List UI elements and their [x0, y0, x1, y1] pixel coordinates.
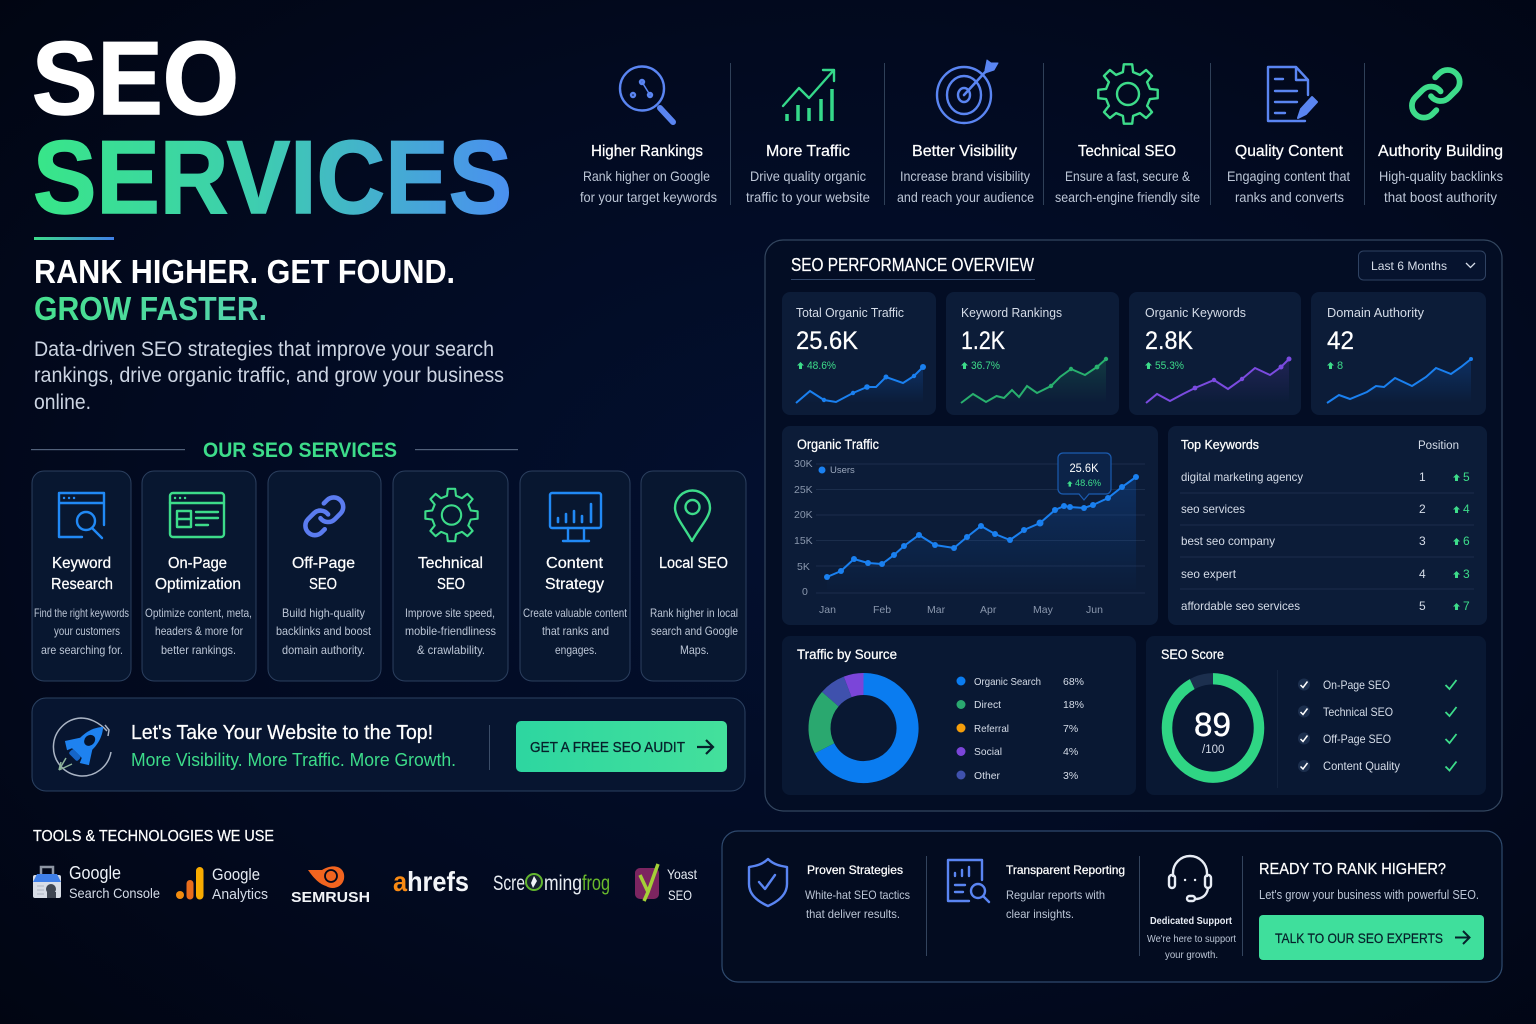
checklist: On-Page SEO — [1323, 678, 1390, 692]
donut chart — [820, 684, 908, 772]
logo: semrush: SEMRUSH — [291, 889, 370, 906]
icon: report with magnifier — [948, 860, 989, 902]
service card: off-page seo: Off-Page — [292, 555, 355, 572]
benefit: better visibility: and reach your audience — [897, 189, 1034, 205]
icon: document and pencil — [1268, 67, 1317, 121]
chart: organic traffic line chart: 30K — [794, 458, 813, 470]
keyword row 1: digital marketing agency — [1181, 470, 1303, 484]
button: talk to our seo experts: TALK TO OUR SEO EXPERTS — [1275, 930, 1443, 946]
service card: technical seo: & crawlability. — [417, 643, 485, 657]
intro paragraph: Data-driven SEO strategies that improve your search — [34, 338, 494, 361]
keyword row 2: 2 — [1419, 502, 1426, 516]
button: get a free seo audit — [516, 721, 727, 772]
logo: google search console: Google — [69, 863, 121, 883]
service card: local seo: search and Google — [651, 624, 738, 638]
kpi card: total organic traffic: 48.6% — [807, 360, 836, 372]
kpi card: domain authority — [1311, 292, 1486, 415]
icon: rocket — [53, 715, 115, 776]
feature: transparent reporting — [948, 860, 1125, 921]
call-to-action banner — [32, 698, 745, 791]
table: top keywords — [1168, 426, 1487, 625]
call to action: ready to rank higher: READY TO RANK HIGHER? — [1259, 861, 1446, 878]
keyword row 4: seo expert — [1181, 567, 1237, 581]
logo: screaming frog — [493, 872, 610, 895]
service card: on-page optimization: headers & more for — [155, 624, 243, 638]
table: top keywords: Position — [1418, 440, 1459, 452]
checklist — [1298, 678, 1456, 773]
benefit: higher rankings: Higher Rankings — [591, 143, 703, 160]
service card: on-page optimization: Optimization — [155, 576, 241, 593]
headline — [34, 253, 455, 327]
keyword row 1: 1 — [1419, 470, 1426, 484]
feature: transparent reporting: Regular reports with — [1006, 888, 1105, 902]
legend: 18% — [1063, 699, 1084, 711]
keyword row 5 — [1181, 599, 1470, 613]
checklist: Technical SEO — [1323, 705, 1393, 719]
service card: keyword research: are searching for. — [41, 643, 123, 657]
benefit: authority building — [1378, 70, 1503, 205]
keyword row 2: seo services — [1181, 502, 1245, 516]
service card: keyword research: your customers — [54, 624, 120, 638]
benefit: better visibility: Increase brand visibility — [900, 168, 1030, 184]
benefit: better visibility — [897, 60, 1034, 205]
keyword row 3: 6 — [1463, 534, 1470, 548]
service card: content strategy: that ranks and — [542, 624, 609, 638]
legend: Direct — [974, 699, 1001, 711]
panel: seo score: SEO Score — [1161, 647, 1224, 662]
keyword row 3 — [1181, 534, 1470, 548]
icon: monitor chart — [550, 493, 601, 541]
kpi card: domain authority: 8 — [1337, 360, 1343, 372]
feature: transparent reporting: Transparent Reporting — [1006, 863, 1125, 877]
panel: seo performance overview: SEO PERFORMANCE OVERVIEW — [791, 255, 1034, 275]
panel: why choose us and final call to action — [722, 831, 1502, 982]
legend: Other — [974, 770, 1000, 782]
logo: google search console: Search Console — [69, 885, 160, 901]
logo: google search console — [33, 863, 160, 901]
keyword row 1 — [1181, 470, 1470, 484]
chart: organic traffic line chart: May — [1033, 604, 1054, 616]
service card: technical seo — [393, 471, 508, 681]
panel: traffic by source — [782, 636, 1136, 795]
service card: local seo: Rank higher in local — [650, 606, 738, 620]
logo: ahrefs: ahrefs — [393, 866, 469, 897]
feature: dedicated support — [1147, 856, 1236, 961]
button: get a free seo audit: GET A FREE SEO AUDIT — [530, 739, 685, 756]
chart: organic traffic line chart: 25K — [794, 484, 813, 496]
service card: local seo — [641, 471, 746, 681]
service card: technical seo: Technical — [418, 555, 483, 572]
headline: GROW FASTER. — [34, 290, 267, 327]
benefit: technical seo: search-engine friendly site — [1055, 189, 1200, 205]
benefit: more traffic — [746, 70, 870, 205]
benefit: better visibility: Better Visibility — [912, 143, 1017, 160]
service card: local seo: Local SEO — [659, 555, 728, 572]
kpi card: organic keywords: 55.3% — [1155, 360, 1184, 372]
keyword row 1: 5 — [1463, 470, 1470, 484]
icon: magnifier — [620, 66, 673, 122]
headline: RANK HIGHER. GET FOUND. — [34, 253, 455, 290]
chart: organic traffic line chart: Apr — [980, 604, 997, 616]
logo: screaming frog: Scre — [493, 872, 525, 895]
kpi card: keyword rankings: 1.2K — [961, 327, 1005, 355]
legend — [956, 676, 1084, 782]
panel: seo score — [1146, 636, 1486, 795]
service card: technical seo: mobile-friendliness — [405, 624, 496, 638]
service card: keyword research: Find the right keywords — [34, 606, 129, 620]
benefit: quality content: ranks and converts — [1235, 189, 1344, 205]
feature: proven strategies — [749, 859, 910, 921]
benefit: technical seo: Technical SEO — [1078, 143, 1176, 160]
service card: off-page seo: domain authority. — [282, 643, 365, 657]
tooltip: 25.6K — [1058, 453, 1111, 500]
legend: 3% — [1063, 770, 1078, 782]
keyword row 5: 7 — [1463, 599, 1470, 613]
benefit: authority building: High-quality backlinks — [1379, 168, 1503, 184]
checklist: Content Quality — [1323, 759, 1400, 773]
legend: Organic Search — [974, 676, 1041, 688]
service card: content strategy: Content — [546, 555, 604, 572]
legend: 4% — [1063, 746, 1078, 758]
service card: keyword research: Research — [51, 576, 113, 593]
logo: yoast seo: Yoast — [667, 866, 697, 882]
kpi card: total organic traffic — [782, 292, 936, 415]
icon: chain link — [305, 497, 343, 535]
icon: gear — [425, 489, 478, 541]
title — [32, 21, 512, 236]
call-to-action banner: More Visibility. More Traffic. More Growth. — [131, 750, 456, 770]
feature: dedicated support: your growth. — [1165, 949, 1218, 961]
feature: proven strategies: that deliver results. — [806, 907, 900, 921]
icon: target — [937, 60, 998, 123]
service card: off-page seo: SEO — [309, 576, 337, 593]
call-to-action banner: Let's Take Your Website to the Top! — [131, 722, 433, 744]
logo: google analytics: Google — [212, 865, 260, 884]
logo: google analytics — [176, 865, 268, 903]
chart: organic traffic line chart — [782, 426, 1158, 625]
service card: content strategy — [520, 471, 630, 681]
intro paragraph: online. — [34, 391, 91, 414]
icon: map pin — [675, 490, 710, 541]
keyword row 2: 4 — [1463, 502, 1470, 516]
benefit: quality content — [1227, 67, 1350, 205]
feature: proven strategies: Proven Strategies — [807, 863, 903, 877]
benefit: higher rankings: Rank higher on Google — [583, 168, 710, 184]
logo: semrush — [291, 866, 370, 906]
chart: organic traffic line chart: Users — [830, 465, 855, 476]
panel: traffic by source: Traffic by Source — [797, 647, 897, 662]
tooltip: 25.6K: 25.6K — [1070, 461, 1098, 475]
chart: organic traffic line chart: Organic Traffic — [797, 437, 879, 452]
service card: content strategy: Strategy — [545, 576, 604, 593]
keyword row 5: affordable seo services — [1181, 599, 1300, 613]
legend: Referral — [974, 723, 1009, 735]
kpi card: total organic traffic: 25.6K — [796, 327, 858, 355]
service card: on-page optimization: better rankings. — [161, 643, 236, 657]
service card: off-page seo — [268, 471, 381, 681]
chart: organic traffic line chart: Jan — [819, 604, 836, 616]
kpi card: organic keywords: Organic Keywords — [1145, 305, 1246, 320]
chart: organic traffic line chart: 15K — [794, 535, 813, 547]
kpi card: keyword rankings: 36.7% — [971, 360, 1000, 372]
panel: seo performance overview — [765, 240, 1502, 811]
benefit: quality content: Quality Content — [1235, 143, 1344, 160]
icon: shield — [749, 859, 787, 906]
kpi card: domain authority: 42 — [1327, 327, 1354, 355]
kpi card: organic keywords: 2.8K — [1145, 327, 1193, 355]
legend: 7% — [1063, 723, 1078, 735]
chart: organic traffic line chart: 20K — [794, 509, 813, 521]
benefit: technical seo — [1055, 64, 1200, 205]
title: SEO — [32, 21, 239, 137]
logo: google analytics: Analytics — [212, 886, 268, 903]
chart: organic traffic line chart: Feb — [873, 604, 891, 616]
benefit: higher rankings — [580, 66, 717, 205]
dropdown: date range — [1358, 251, 1486, 280]
service card: content strategy: Create valuable content — [523, 606, 628, 620]
intro paragraph: rankings, drive organic traffic, and grow your business — [34, 364, 504, 387]
call to action: ready to rank higher — [1259, 861, 1484, 960]
benefit: more traffic: Drive quality organic — [750, 168, 866, 184]
logo: yoast seo: SEO — [668, 887, 692, 903]
keyword row 3: 3 — [1419, 534, 1426, 548]
feature: transparent reporting: clear insights. — [1006, 907, 1074, 921]
service card: content strategy: engages. — [555, 643, 597, 657]
benefit: authority building: Authority Building — [1378, 143, 1503, 160]
checklist: Off-Page SEO — [1323, 732, 1391, 746]
intro paragraph — [34, 338, 504, 414]
benefit: more traffic: More Traffic — [766, 143, 850, 160]
legend: 68% — [1063, 676, 1084, 688]
chart: organic traffic line chart: Jun — [1086, 604, 1103, 616]
service card: off-page seo: Build high-quality — [282, 606, 365, 620]
chart: organic traffic line chart: Mar — [927, 604, 946, 616]
keyword row 2 — [1181, 502, 1470, 516]
call to action: ready to rank higher: Let's grow your business with powerful SEO. — [1259, 888, 1479, 902]
kpi card: domain authority: Domain Authority — [1327, 305, 1424, 320]
keyword row 4: 3 — [1463, 567, 1470, 581]
kpi card: keyword rankings: Keyword Rankings — [961, 305, 1062, 320]
chart: organic traffic line chart: 0 — [802, 586, 808, 598]
tooltip: 25.6K: 48.6% — [1075, 478, 1102, 489]
feature: proven strategies: White-hat SEO tactics — [805, 888, 910, 902]
kpi card: organic keywords — [1129, 292, 1301, 415]
section heading: our seo services: OUR SEO SERVICES — [203, 439, 397, 462]
title: SERVICES — [33, 120, 512, 236]
service card: on-page optimization: On-Page — [168, 555, 227, 572]
logo: yoast seo — [635, 864, 697, 903]
benefit: more traffic: traffic to your website — [746, 189, 870, 205]
table: top keywords: Top Keywords — [1181, 437, 1259, 452]
service card: on-page optimization: Optimize content, meta, — [145, 606, 252, 620]
icon: headset — [1169, 856, 1211, 901]
score ring: 89/100 — [1167, 679, 1259, 777]
logo: screaming frog: frog — [582, 872, 610, 895]
keyword row 4: 4 — [1419, 567, 1426, 581]
dropdown: date range: Last 6 Months — [1371, 259, 1447, 273]
kpi card: keyword rankings — [946, 292, 1119, 415]
benefit: higher rankings: for your target keywords — [580, 189, 717, 205]
keyword row 3: best seo company — [1181, 534, 1275, 548]
legend: Social — [974, 746, 1002, 758]
service card: on-page optimization — [142, 471, 256, 681]
service card: off-page seo: backlinks and boost — [276, 624, 372, 638]
service card: keyword research — [32, 471, 131, 681]
service card: technical seo: Improve site speed, — [405, 606, 495, 620]
benefit: technical seo: Ensure a fast, secure & — [1065, 168, 1191, 184]
icon: web page — [170, 493, 224, 537]
score ring: 89/100: /100 — [1202, 744, 1224, 756]
service card: local seo: Maps. — [680, 643, 709, 657]
feature: dedicated support: Dedicated Support — [1150, 915, 1232, 927]
feature: dedicated support: We're here to support — [1147, 933, 1236, 945]
button: talk to our seo experts — [1259, 915, 1484, 960]
logo: screaming frog: ming — [544, 872, 582, 895]
icon: chain link — [1412, 70, 1460, 118]
icon: keyword research — [59, 493, 104, 538]
keyword row 4 — [1181, 567, 1470, 581]
service card: keyword research: Keyword — [52, 555, 111, 572]
benefit: authority building: that boost authority — [1384, 189, 1497, 205]
keyword row 5: 5 — [1419, 599, 1426, 613]
kpi card: total organic traffic: Total Organic Traffic — [796, 305, 904, 320]
chart: organic traffic line chart: 5K — [797, 561, 810, 573]
score ring: 89/100: 89 — [1194, 706, 1231, 743]
benefit: quality content: Engaging content that — [1227, 168, 1350, 184]
icon: growth chart — [783, 70, 834, 121]
icon: gear — [1098, 64, 1158, 124]
service card: technical seo: SEO — [437, 576, 465, 593]
tools heading: TOOLS & TECHNOLOGIES WE USE — [33, 828, 274, 845]
